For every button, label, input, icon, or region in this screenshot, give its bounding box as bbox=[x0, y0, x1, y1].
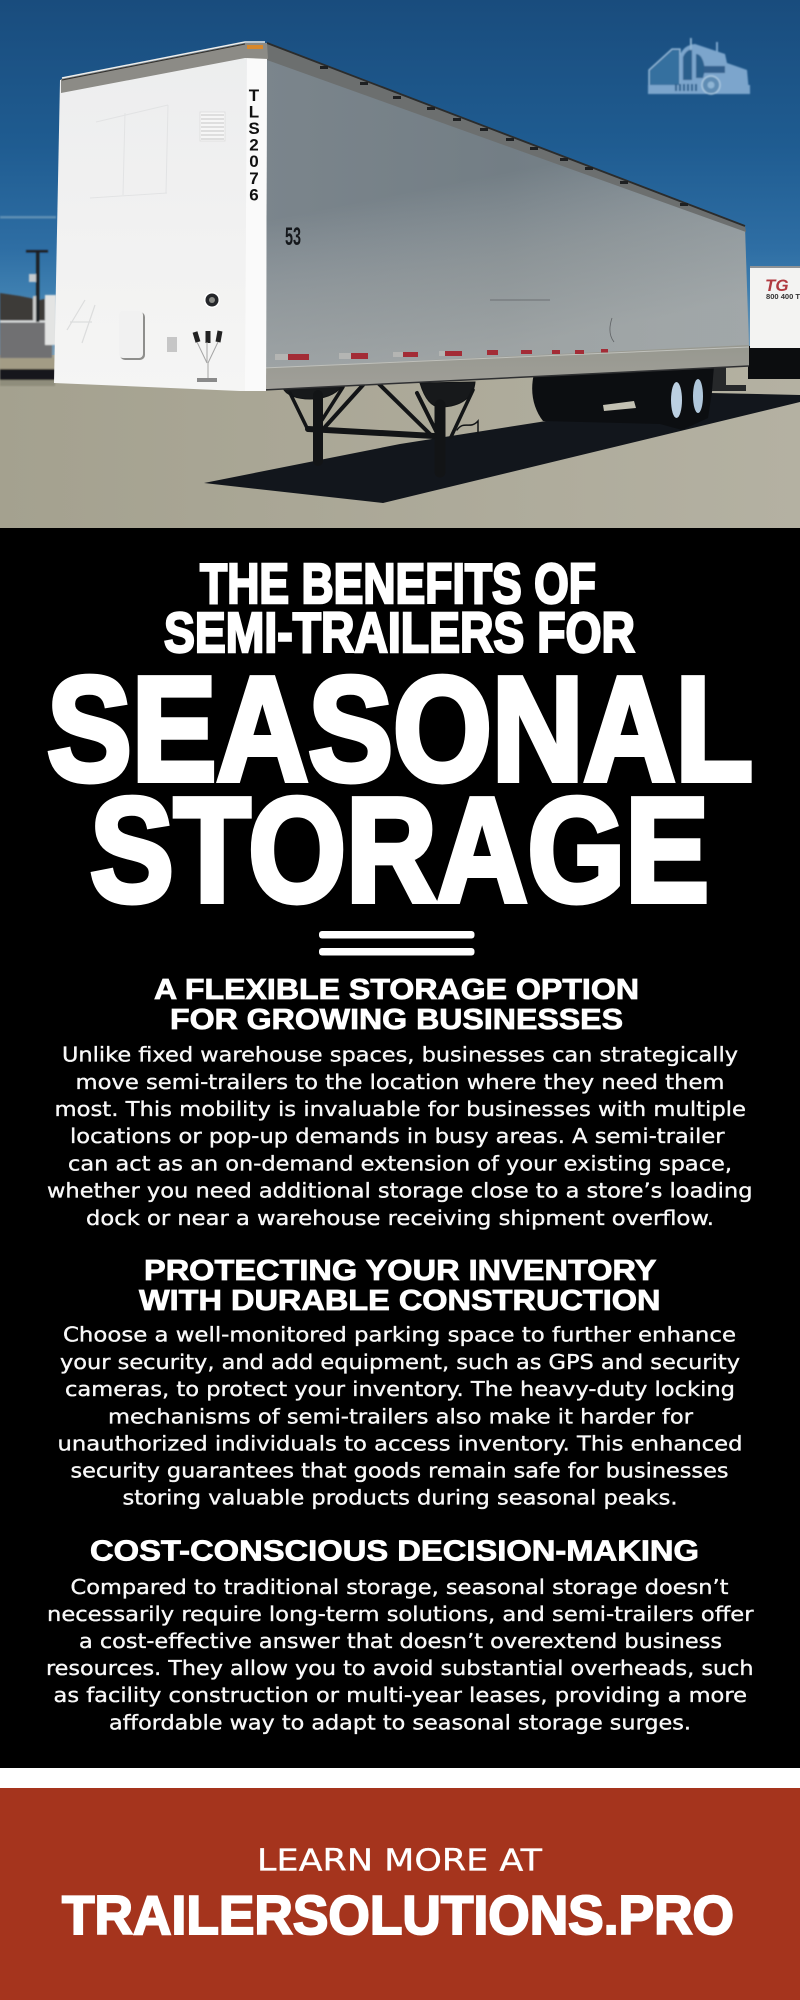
footer call to action panel bbox=[0, 1788, 800, 2000]
landing gear bbox=[283, 382, 478, 472]
section 1 body text bbox=[47, 1043, 752, 1230]
section 1 body text: can act as an on-demand extension of your existing space, bbox=[68, 1152, 732, 1176]
trailer front face bbox=[54, 42, 268, 391]
trailer side wall bbox=[263, 43, 749, 368]
title: STORAGE bbox=[90, 768, 709, 933]
brand logo: truck bbox=[648, 38, 750, 94]
section 1 body text: move semi-trailers to the location where they need them bbox=[76, 1070, 724, 1094]
hero photo: white semi-trailer bbox=[0, 0, 800, 528]
cast shadow on ground bbox=[204, 393, 800, 503]
section 2 heading: WITH DURABLE CONSTRUCTION bbox=[139, 1285, 660, 1317]
section 1 body text: whether you need additional storage close to a store’s loading bbox=[47, 1179, 752, 1203]
section 1 body text: most. This mobility is invaluable for businesses with multiple bbox=[54, 1097, 746, 1121]
divider: double bars bbox=[319, 931, 474, 956]
right background truck box: 800 400 T bbox=[766, 292, 800, 301]
section 1 body text: locations or pop-up demands in busy areas. A semi-trailer bbox=[70, 1124, 725, 1148]
trailer number 53: 53 bbox=[285, 223, 301, 251]
section 1: flexible storage bbox=[47, 974, 752, 1230]
section 2 body text: unauthorized individuals to access inventory. This enhanced bbox=[58, 1431, 742, 1455]
section 1 heading: FOR GROWING BUSINESSES bbox=[170, 1004, 623, 1036]
section 3 body text: Compared to traditional storage, seasonal storage doesn’t bbox=[70, 1575, 729, 1599]
section 2 body text: your security, and add equipment, such as GPS and security bbox=[60, 1350, 740, 1374]
section 1 body text: Unlike fixed warehouse spaces, businesses can strategically bbox=[62, 1043, 738, 1067]
section 3 body text bbox=[46, 1575, 754, 1734]
learn more label: LEARN MORE AT bbox=[257, 1844, 543, 1879]
trailer ID lettering TLS2076: S bbox=[248, 119, 260, 138]
front face details: light, hatch, connectors bbox=[67, 292, 220, 382]
section 2 heading: PROTECTING YOUR INVENTORY bbox=[144, 1255, 656, 1287]
section 2 body text: cameras, to protect your inventory. The heavy-duty locking bbox=[65, 1377, 735, 1401]
section 2 heading bbox=[139, 1255, 660, 1317]
section 3 body text: necessarily require long-term solutions, and semi-trailers offer bbox=[47, 1602, 754, 1626]
section 1 body text: dock or near a warehouse receiving shipment overflow. bbox=[86, 1206, 714, 1230]
section 3 body text: a cost-effective answer that doesn’t overextend business bbox=[79, 1629, 722, 1653]
section 1 heading: A FLEXIBLE STORAGE OPTION bbox=[154, 974, 639, 1006]
trailer ID lettering TLS2076: 0 bbox=[249, 152, 259, 171]
trailer ID lettering TLS2076: 2 bbox=[249, 136, 259, 154]
section 3 body text: as facility construction or multi-year leases, providing a more bbox=[54, 1683, 747, 1707]
section 2 body text: security guarantees that goods remain safe for businesses bbox=[70, 1459, 728, 1483]
trailer ID lettering TLS2076: 6 bbox=[249, 186, 259, 204]
section 3: cost-conscious bbox=[46, 1536, 754, 1734]
title bbox=[47, 552, 753, 933]
white separator strip bbox=[0, 1768, 800, 1788]
trailer ID lettering TLS2076 bbox=[248, 86, 260, 204]
background scene: trees, pole, wall bbox=[0, 216, 56, 386]
undercarriage and wheels bbox=[532, 366, 746, 430]
title: THE BENEFITS OF bbox=[200, 552, 596, 616]
section 2 body text: Choose a well-monitored parking space to further enhance bbox=[63, 1323, 736, 1347]
section 2 body text: storing valuable products during seasonal peaks. bbox=[122, 1486, 678, 1510]
black content panel bbox=[0, 528, 800, 1768]
right background truck box: TG bbox=[765, 276, 789, 295]
section 2: durable construction bbox=[58, 1255, 742, 1510]
right background truck box bbox=[748, 266, 800, 379]
section 2 body text: mechanisms of semi-trailers also make it harder for bbox=[108, 1404, 694, 1428]
trailer ID lettering TLS2076: 7 bbox=[249, 169, 259, 188]
trailer rail with marker lights bbox=[263, 345, 749, 390]
website url: TRAILERSOLUTIONS.PRO bbox=[62, 1884, 734, 1946]
sky bbox=[0, 0, 800, 365]
title: SEMI-TRAILERS FOR bbox=[164, 601, 635, 665]
section 3 heading: COST-CONSCIOUS DECISION-MAKING bbox=[90, 1536, 699, 1568]
section 3 body text: affordable way to adapt to seasonal storage surges. bbox=[109, 1710, 691, 1734]
section 1 heading bbox=[154, 974, 639, 1036]
section 3 body text: resources. They allow you to avoid substantial overheads, such bbox=[46, 1656, 754, 1680]
trailer ID lettering TLS2076: L bbox=[249, 102, 259, 122]
trailer ID lettering TLS2076: T bbox=[249, 86, 260, 105]
section 2 body text bbox=[58, 1323, 742, 1510]
ground bbox=[0, 355, 800, 528]
